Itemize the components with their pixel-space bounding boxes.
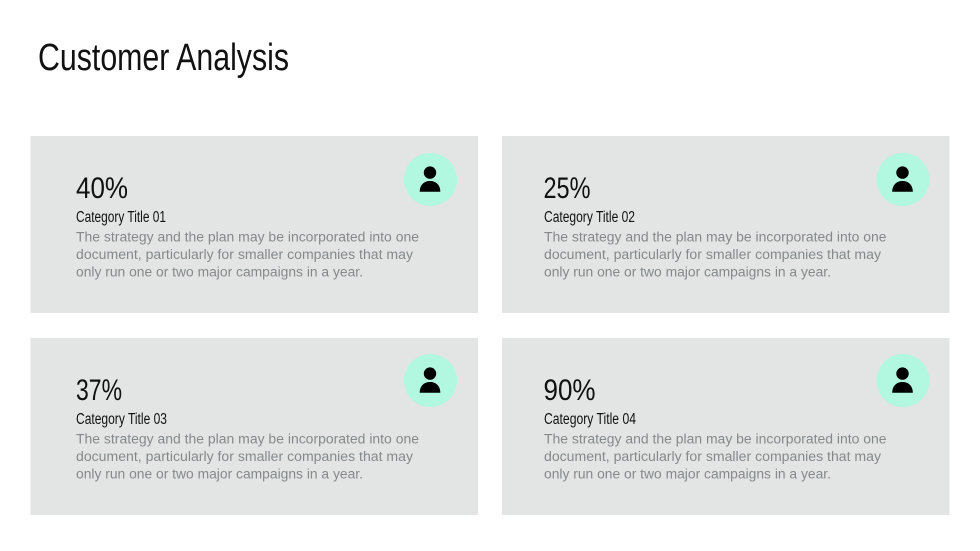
text block: description 02 xyxy=(544,230,886,279)
text block: description 02: only run one or two major campaigns in a year. xyxy=(544,264,831,279)
text block: description 01: document, particularly for smaller companies that may xyxy=(76,247,413,262)
heading: category title 03: Category Title 03 xyxy=(76,411,167,428)
text block: description 03: The strategy and the plan may be incorporated into one xyxy=(76,432,419,447)
stat: 90%: 90% xyxy=(544,374,596,407)
icon: person 03 xyxy=(404,354,457,407)
text block: description 04 xyxy=(544,432,886,481)
text block: description 03: document, particularly for smaller companies that may xyxy=(76,449,413,464)
title: Customer Analysis xyxy=(38,37,289,79)
text block: description 03 xyxy=(76,432,419,481)
panel: category 02 xyxy=(502,136,950,313)
text block: description 03: only run one or two major campaigns in a year. xyxy=(76,466,363,481)
icon: person 04 xyxy=(876,354,930,407)
stat: 40%: 40% xyxy=(76,172,128,205)
text block: description 04: The strategy and the plan may be incorporated into one xyxy=(544,432,886,447)
heading: category title 01: Category Title 01 xyxy=(76,209,166,226)
icon: person 01 xyxy=(404,153,457,206)
text block: description 02: document, particularly for smaller companies that may xyxy=(544,247,881,262)
panel: category 04 xyxy=(502,338,950,515)
text block: description 04: document, particularly for smaller companies that may xyxy=(544,449,881,464)
stat: 37%: 37% xyxy=(76,374,122,407)
heading: category title 02: Category Title 02 xyxy=(544,209,635,226)
text block: description 01: The strategy and the plan may be incorporated into one xyxy=(76,230,419,245)
panel: category 03 xyxy=(30,338,478,515)
text block: description 01: only run one or two major campaigns in a year. xyxy=(76,264,363,279)
icon: person 02 xyxy=(876,153,930,206)
text block: description 02: The strategy and the plan may be incorporated into one xyxy=(544,230,886,245)
panel: category 01 xyxy=(30,136,478,313)
heading: category title 04: Category Title 04 xyxy=(544,411,636,428)
text block: description 04: only run one or two major campaigns in a year. xyxy=(544,466,831,481)
stat: 25%: 25% xyxy=(544,172,590,205)
text block: description 01 xyxy=(76,230,419,279)
